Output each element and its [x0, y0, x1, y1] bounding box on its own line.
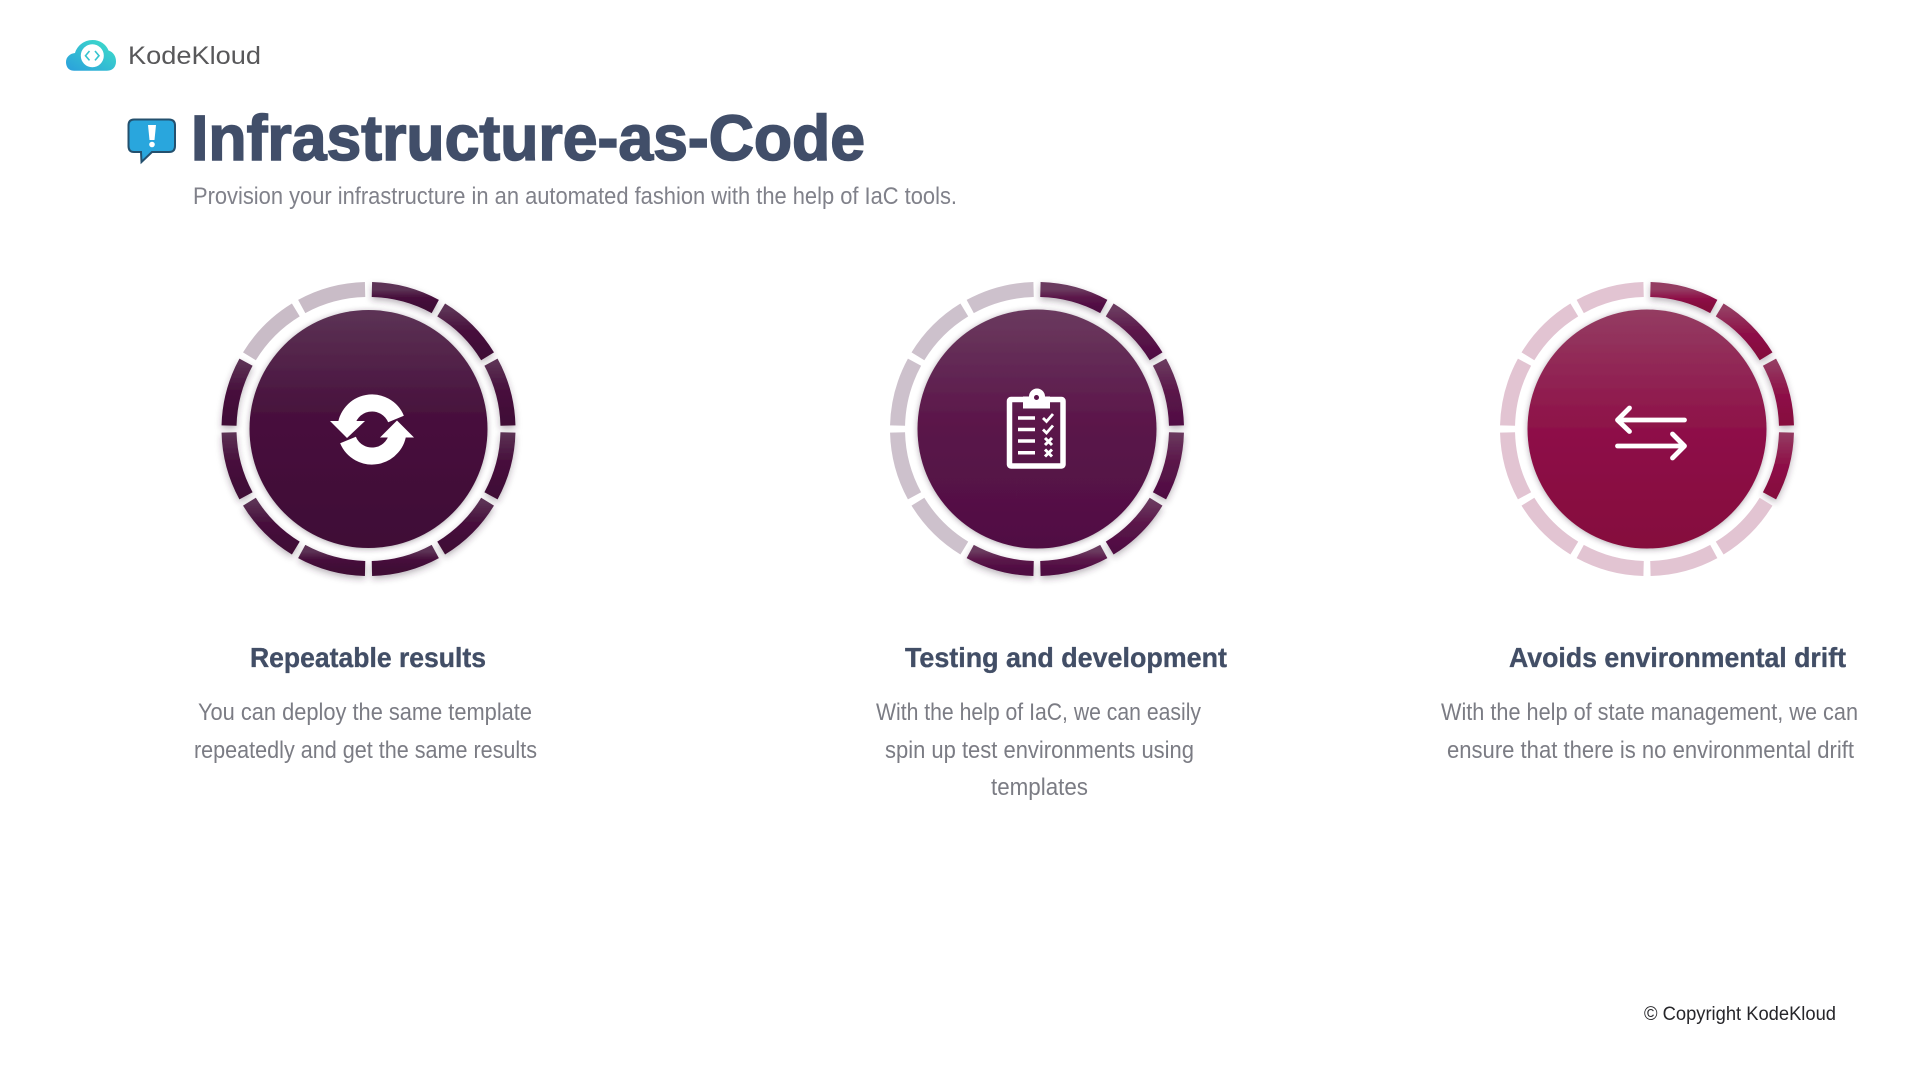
- heading: Avoids environmental drift: [1509, 642, 1846, 673]
- central disc: [1528, 310, 1766, 548]
- subtitle: Provision your infrastructure in an automated fashion with the help of IaC tools.: [193, 183, 957, 210]
- panel: avoids environmental drift: [1441, 290, 1858, 764]
- ring: unfilled segments: [1508, 290, 1766, 568]
- icon: speech bubble with exclamation mark: [128, 120, 175, 162]
- description: ensure that there is no environmental drift: [1447, 737, 1854, 764]
- progress ring: 4 of 12 segments filled: [1650, 290, 1786, 496]
- title: Infrastructure-as-Code: [191, 102, 865, 174]
- logo wordmark: KodeKloud: [128, 42, 261, 70]
- description: [1441, 699, 1858, 764]
- panel: repeatable results: [194, 290, 537, 764]
- description: [194, 699, 537, 764]
- icon: opposing arrows: [1618, 408, 1684, 458]
- description: spin up test environments using: [885, 737, 1194, 764]
- description: You can deploy the same template: [198, 699, 532, 726]
- heading: Repeatable results: [250, 642, 486, 673]
- icon: refresh arrows: [330, 403, 414, 456]
- panel: testing and development: [876, 290, 1227, 801]
- ring: unfilled segments: [249, 290, 365, 356]
- progress ring: 7 of 12 segments filled: [970, 290, 1176, 568]
- heading: Testing and development: [905, 642, 1227, 673]
- central disc: [918, 310, 1156, 548]
- description: With the help of IaC, we can easily: [876, 699, 1201, 726]
- central disc: [250, 310, 488, 548]
- description: [876, 699, 1201, 801]
- logo: KodeKloud: [66, 40, 261, 71]
- description: repeatedly and get the same results: [194, 737, 537, 764]
- description: templates: [991, 774, 1088, 801]
- progress ring: 10 of 12 segments filled: [229, 290, 508, 568]
- icon: cloud logo: [66, 40, 116, 71]
- description: With the help of state management, we can: [1441, 699, 1858, 726]
- copyright: © Copyright KodeKloud: [1644, 1004, 1836, 1025]
- ring: unfilled segments: [898, 290, 1034, 548]
- icon: clipboard checklist: [1010, 388, 1063, 466]
